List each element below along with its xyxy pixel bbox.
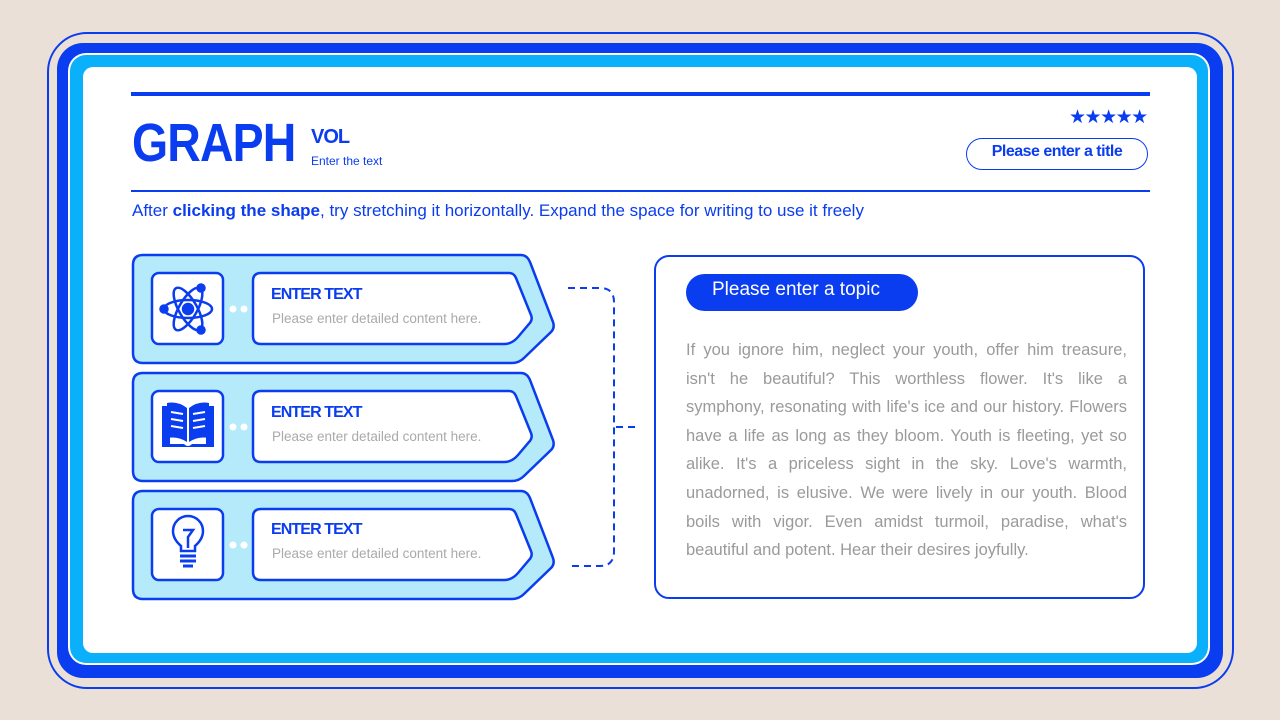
icon: book (162, 403, 214, 447)
card texts: ENTER TEXT (271, 404, 362, 421)
divider (131, 190, 1150, 192)
title: GRAPH (132, 113, 295, 173)
icon: bulb (173, 516, 203, 566)
card texts: Please enter detailed content here. (272, 429, 481, 444)
connector: dashed bracket (568, 288, 636, 566)
title pill (966, 138, 1148, 170)
card 1 (133, 255, 554, 363)
white inner panel (83, 67, 1197, 653)
card texts: ENTER TEXT (271, 521, 362, 538)
topic pill (686, 274, 918, 311)
card 2 (133, 373, 554, 481)
stars: ★★★★★ (1069, 107, 1147, 128)
card texts: Please enter detailed content here. (272, 311, 481, 326)
panel: topic text (654, 255, 1145, 599)
card texts: Please enter detailed content here. (272, 546, 481, 561)
icon: atom (160, 284, 212, 334)
card texts: ENTER TEXT (271, 286, 362, 303)
card texts (271, 286, 481, 561)
body paragraph: If you ignore him, neglect your youth, offer him treasure, isn't he beautiful? This worthless flower. It's like a symphony, resonating with life's ice and our history. Flowers have a life as long as they bloom. Youth is fleeting, yet so alike. It's a priceless sight in the sky. Love's warmth, unadorned, is elusive. We were lively in our youth. Blood boils with vigor. Even amidst turmoil, paradise, what's beautiful and potent. Hear their desires joyfully. (686, 341, 1127, 559)
title pill: Please enter a title (992, 143, 1122, 160)
subtitle text: Enter the text (311, 154, 382, 168)
white line (68, 53, 1210, 665)
top rule (131, 92, 1150, 96)
topic pill: Please enter a topic (712, 279, 880, 300)
instruction text: After clicking the shape, try stretching it horizontally. Expand the space for writing to use it freely (132, 201, 864, 220)
subtitle VOL: VOL (311, 126, 349, 148)
cyan band (70, 55, 1208, 663)
card 3 (133, 491, 554, 599)
